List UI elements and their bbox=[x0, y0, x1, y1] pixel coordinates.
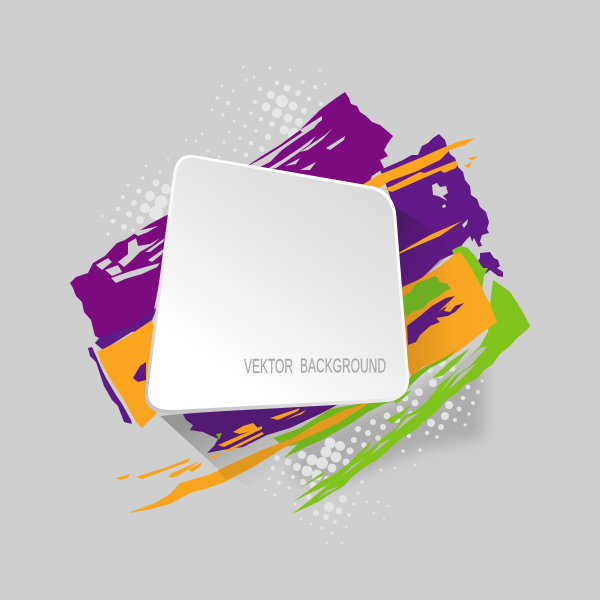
purple streak on orange bbox=[407, 296, 464, 345]
brush: long orange stroke bbox=[128, 402, 370, 513]
holes in upper magenta bbox=[250, 116, 345, 172]
holes in left magenta bbox=[96, 226, 165, 283]
brush: main green band bbox=[292, 280, 530, 514]
card caption bbox=[244, 356, 386, 378]
holes in right purple bbox=[432, 183, 478, 252]
card cast shadow bbox=[160, 350, 470, 505]
left purple strip bbox=[95, 306, 158, 350]
shaded part of orange stroke bbox=[218, 402, 368, 480]
brush: green strip under orange bbox=[273, 350, 457, 458]
halftone: lower dots bbox=[264, 360, 484, 544]
card caption: VEKTOR bbox=[244, 356, 293, 378]
card bbox=[145, 155, 409, 414]
brush: top right orange bbox=[362, 138, 475, 190]
card outer rim bbox=[145, 155, 409, 414]
gray streaks in green band bbox=[318, 346, 488, 498]
brush: green back bbox=[452, 246, 488, 290]
green fleck on purple bbox=[216, 433, 222, 440]
card face bbox=[148, 158, 406, 410]
orange streaks on purple bbox=[384, 156, 478, 254]
brush: right dark purple bbox=[380, 134, 489, 295]
purple mark on orange bbox=[133, 362, 146, 382]
brush: purple splatter right bbox=[476, 252, 503, 278]
brush: left magenta bbox=[70, 215, 172, 340]
brush: right orange block bbox=[400, 252, 497, 377]
brush: upper magenta bbox=[247, 92, 393, 186]
halftone: upper dots bbox=[101, 66, 326, 236]
shadow on right purple bbox=[394, 206, 455, 296]
orange streaks lower left bbox=[116, 452, 222, 480]
card caption: BACKGROUND bbox=[300, 356, 386, 378]
left splatter edge bbox=[88, 347, 132, 424]
orange marks on lower purple bbox=[218, 408, 306, 451]
green patch on orange bbox=[403, 276, 451, 318]
brush: left orange block bbox=[97, 320, 158, 428]
green band shards bbox=[293, 348, 470, 502]
soft shadow lower right bbox=[290, 352, 484, 486]
brush: lower purple bbox=[183, 402, 340, 453]
